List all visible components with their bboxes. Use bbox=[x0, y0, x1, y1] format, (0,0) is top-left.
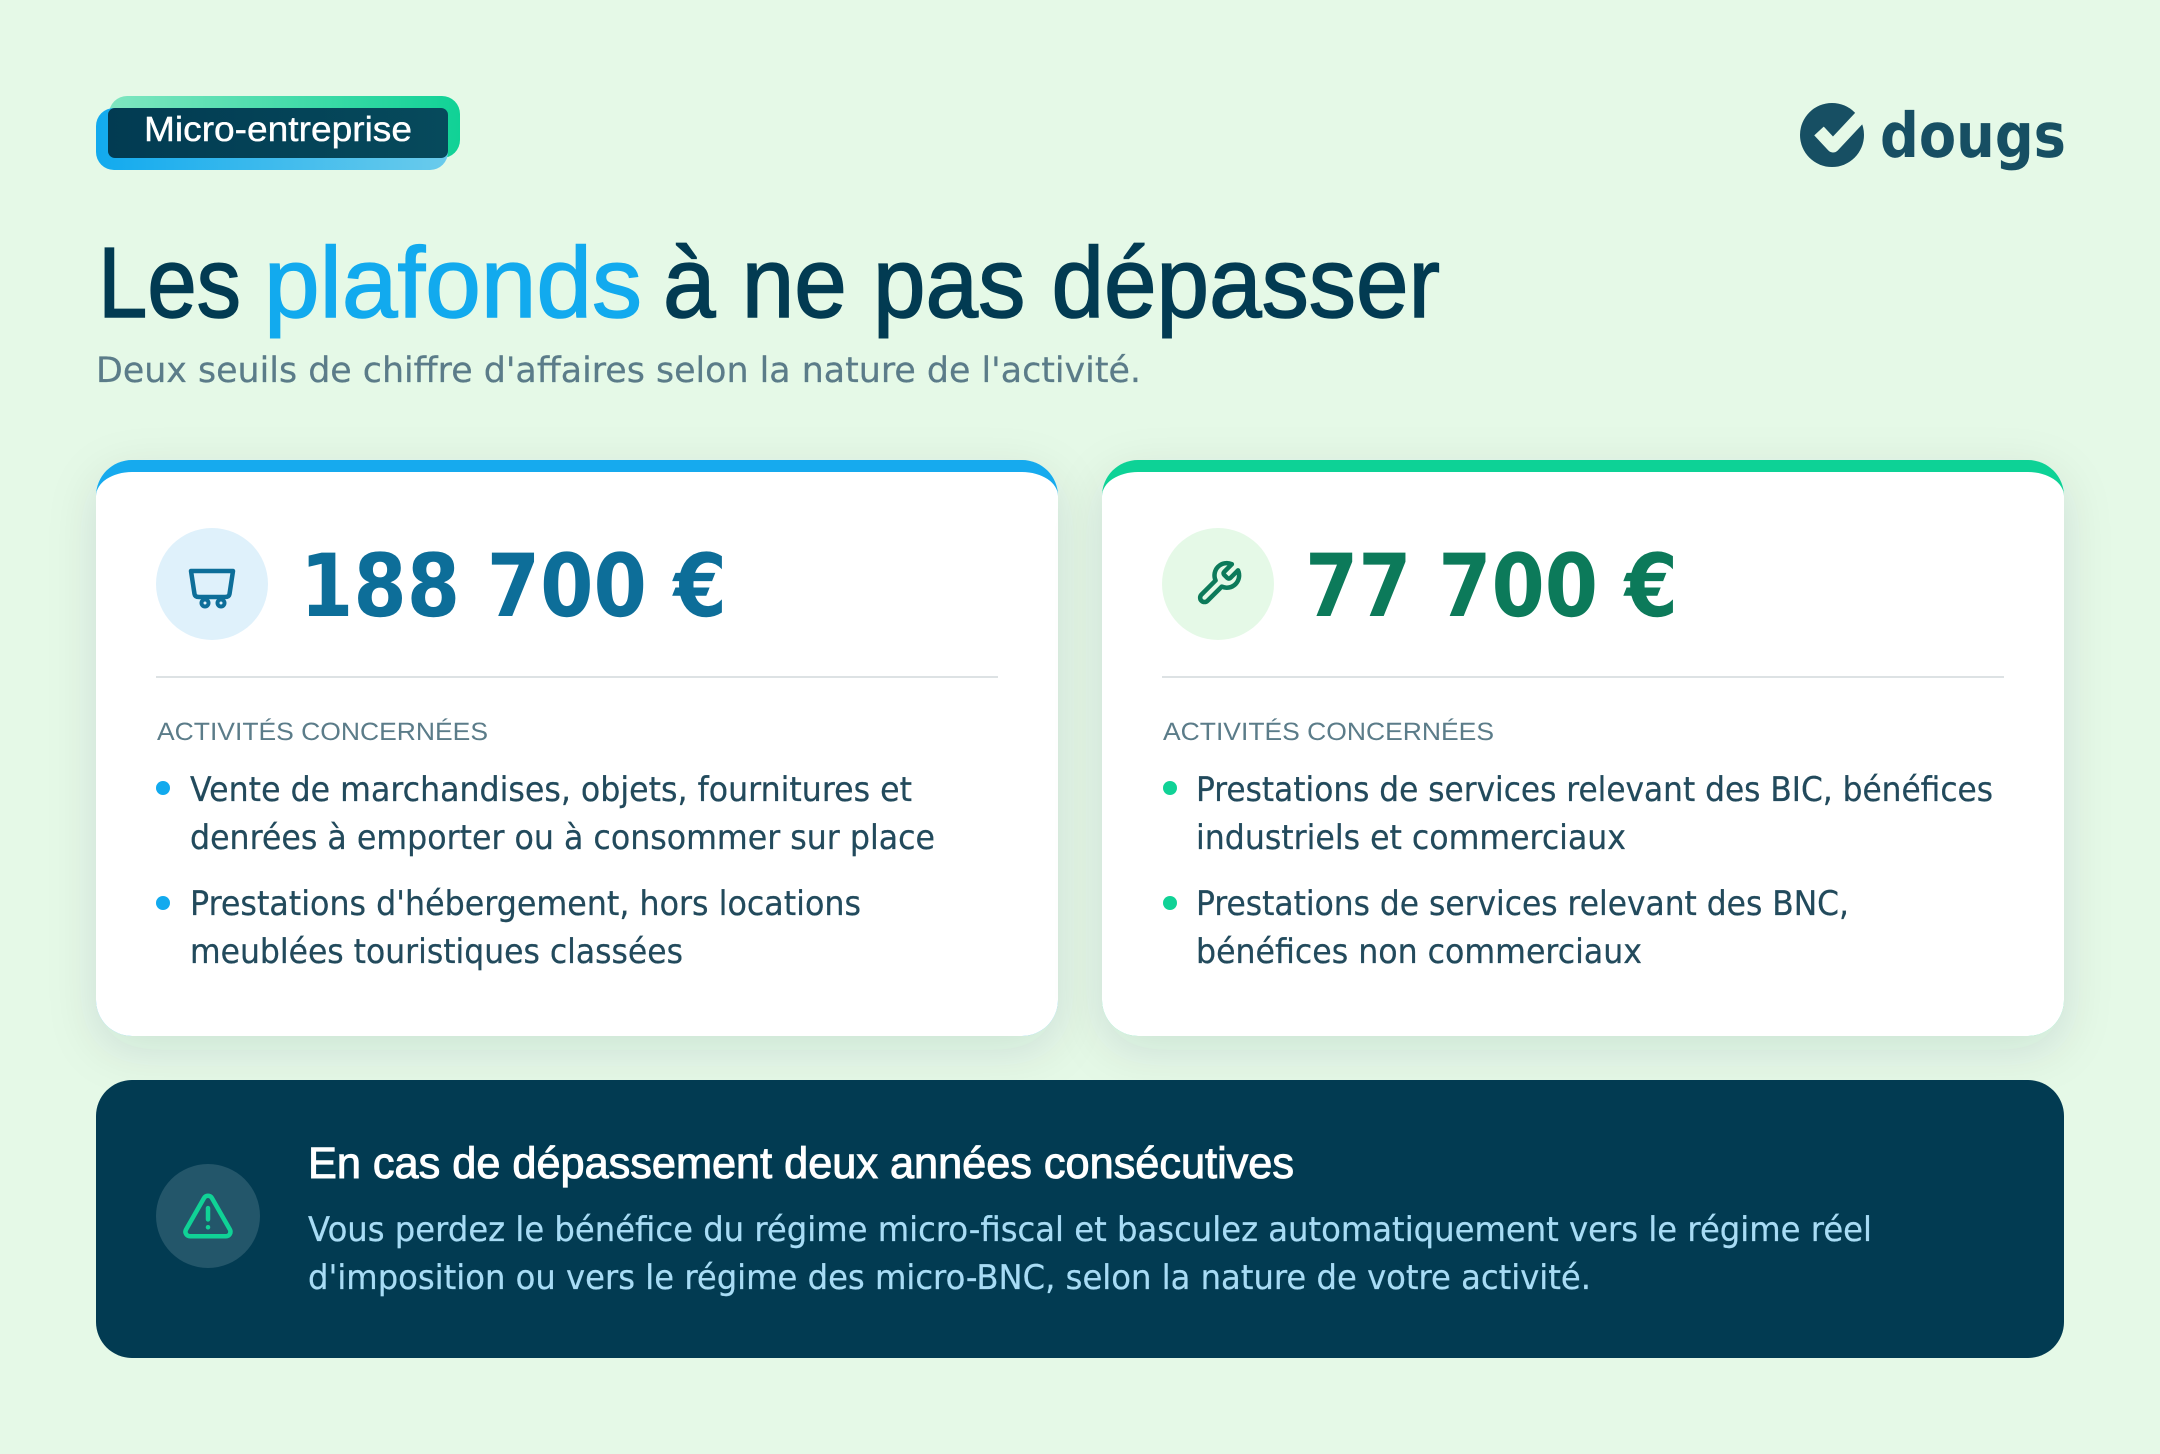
badge: Micro-entreprise: Micro-entreprise bbox=[144, 110, 412, 149]
card left background bbox=[96, 460, 1058, 1036]
icon: cart bbox=[156, 528, 268, 640]
title: Les bbox=[98, 227, 241, 339]
list item 2 bbox=[1163, 884, 1849, 972]
icon: wrench bbox=[1162, 528, 1274, 640]
list item 2: meublées touristiques classées bbox=[190, 932, 683, 972]
list item 2: Prestations de services relevant des BNC, bbox=[1196, 884, 1849, 924]
logo: dougs bbox=[1800, 99, 2066, 172]
banner body text: Vous perdez le bénéfice du régime micro-fiscal et basculez automatiquement vers le régime réel bbox=[308, 1210, 1872, 1250]
amount: 77 700 €: 77 700 € bbox=[1305, 535, 1678, 637]
panel: card left, 188 700 € bbox=[96, 460, 1058, 1036]
list item 2: Prestations d'hébergement, hors locations bbox=[190, 884, 861, 924]
panel: warning banner bbox=[96, 1080, 2064, 1358]
label: activités concernées: ACTIVITÉS CONCERNÉES bbox=[157, 718, 488, 746]
title: plafonds bbox=[264, 227, 642, 339]
banner body text: d'imposition ou vers le régime des micro-BNC, selon la nature de votre activité. bbox=[308, 1258, 1591, 1298]
banner body text bbox=[308, 1210, 1872, 1298]
logo: dougs: dougs bbox=[1880, 99, 2066, 172]
list item 1: denrées à emporter ou à consommer sur place bbox=[190, 818, 935, 858]
list item 1 bbox=[156, 770, 935, 858]
list item 1: Prestations de services relevant des BIC, bénéfices bbox=[1196, 770, 1993, 810]
banner heading: En cas de dépassement deux années consécutives bbox=[308, 1139, 1294, 1188]
title: à ne pas dépasser bbox=[663, 227, 1440, 339]
icon: warning triangle bbox=[156, 1164, 260, 1268]
list item 1 bbox=[1163, 770, 1993, 858]
label: activités concernées: ACTIVITÉS CONCERNÉES bbox=[1163, 718, 1494, 746]
amount: 188 700 €: 188 700 € bbox=[300, 535, 727, 637]
subtitle: Deux seuils de chiffre d'affaires selon la nature de l'activité. bbox=[96, 351, 1141, 391]
card right background bbox=[1102, 460, 2064, 1036]
list item 1: industriels et commerciaux bbox=[1196, 818, 1626, 858]
title bbox=[98, 227, 1440, 339]
list item 2: bénéfices non commerciaux bbox=[1196, 932, 1642, 972]
panel: card right, 77 700 € bbox=[1102, 460, 2064, 1036]
list item 2 bbox=[156, 884, 861, 972]
badge: Micro-entreprise bbox=[96, 96, 460, 170]
list item 1: Vente de marchandises, objets, fournitures et bbox=[190, 770, 912, 810]
